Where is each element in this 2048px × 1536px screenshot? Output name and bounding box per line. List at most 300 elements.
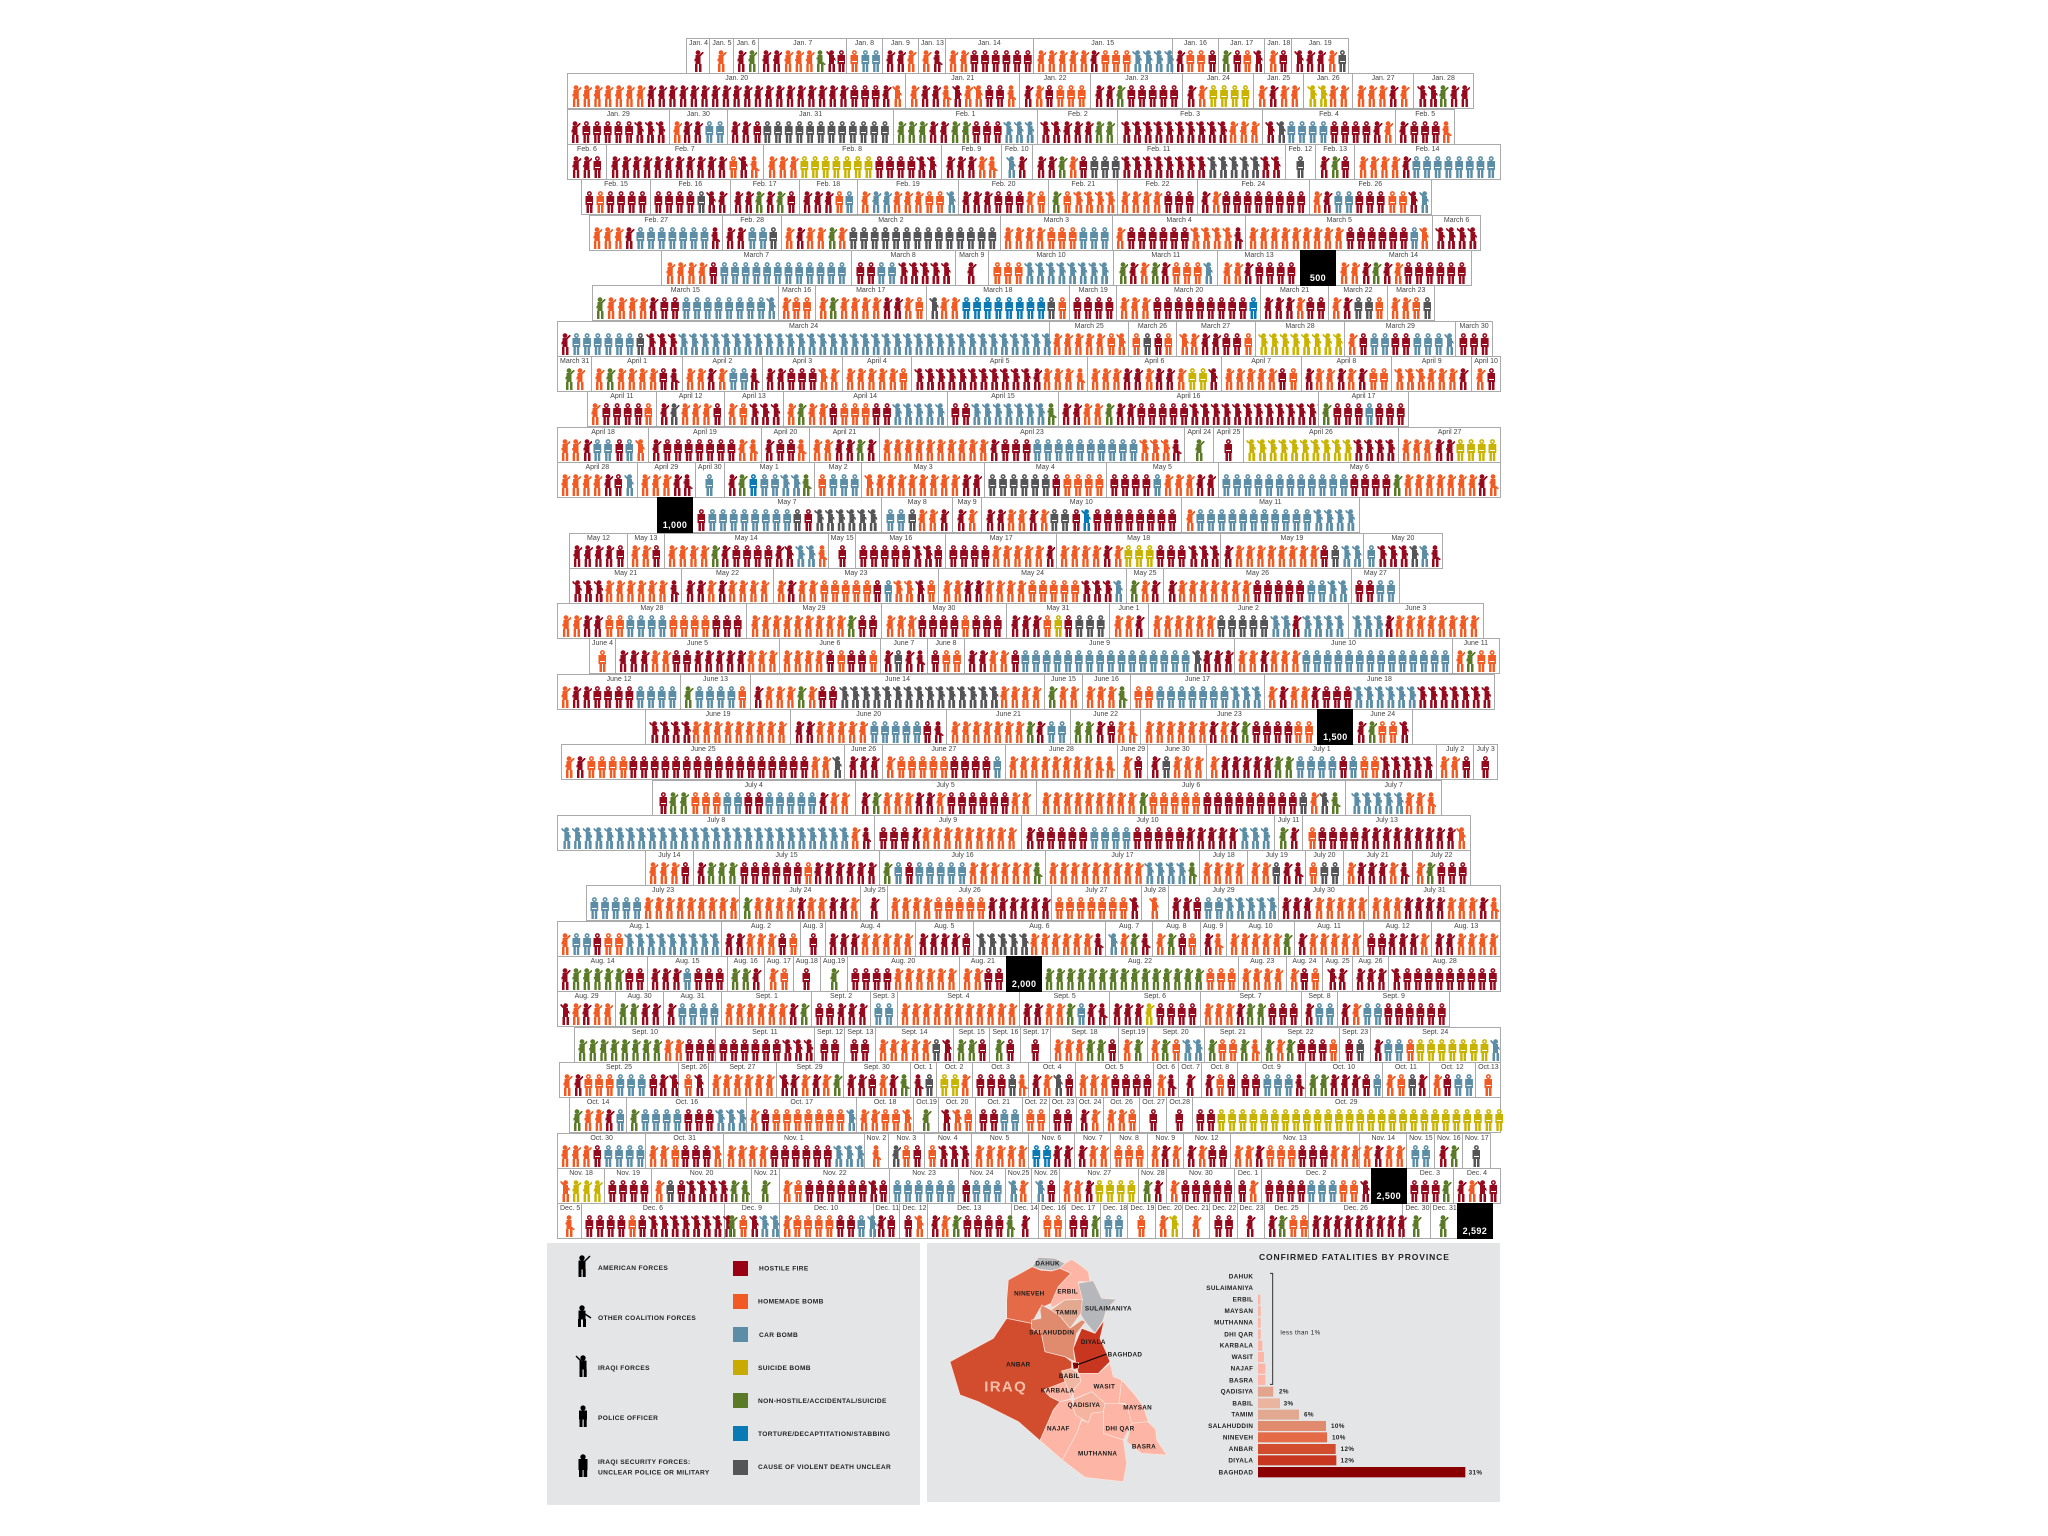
row: March 15 to March 23: March 16	[782, 287, 811, 294]
row: June 25 to July 3: June 25	[691, 746, 716, 753]
row: March 15 to March 23: March 23	[1396, 287, 1425, 294]
row: Oct. 30 to Nov. 17	[557, 1133, 1491, 1168]
row: Oct. 30 to Nov. 17: Nov. 3	[896, 1135, 916, 1142]
row: May 21 to May 27: May 24	[1021, 570, 1044, 577]
row: May 7 to May 11: May 8	[908, 499, 927, 506]
row: Feb. 27 to March 6: Feb. 27	[644, 217, 668, 224]
axis labels: SALAHUDDIN	[1208, 1423, 1253, 1430]
row: Sept. 10 to Sept. 24: Sept. 22	[1288, 1029, 1314, 1036]
row: April 18 to April 27: April 19	[693, 429, 717, 436]
row: April 11 to April 17	[587, 392, 1409, 427]
value labels: 6%	[1304, 1412, 1314, 1419]
row: Aug. 1 to Aug. 13: Aug. 13	[1454, 923, 1478, 930]
row: April 18 to April 27: April 26	[1309, 429, 1333, 436]
label: province names: TAMIM	[1056, 1310, 1078, 1317]
axis labels: MAYSAN	[1224, 1308, 1253, 1315]
row: July 14 to July 22: July 14	[658, 852, 680, 859]
row: Sept. 25 to Oct. 13: Sept. 26	[681, 1064, 707, 1071]
row: Feb. 27 to March 6: March 3	[1044, 217, 1069, 224]
row: Aug. 29 to Sept. 9: Sept. 2	[830, 993, 852, 1000]
row: June 25 to July 3: July 3	[1477, 746, 1495, 753]
row: Feb. 27 to March 6: March 5	[1327, 217, 1352, 224]
row: Jan. 29 to Feb. 5: Feb. 2	[1068, 111, 1088, 118]
row: Nov. 18 to Dec. 4	[557, 1168, 1501, 1204]
row: Feb. 15 to Feb. 26: Feb. 17	[753, 181, 777, 188]
row: Aug. 14 to Aug. 28: Aug. 21	[971, 958, 995, 965]
row: Dec. 5 to Dec. 31: Dec. 20	[1158, 1205, 1182, 1212]
row: March 31 to April 10: April 10	[1474, 358, 1498, 365]
row: June 12 to June 18: June 16	[1094, 676, 1119, 683]
row: Dec. 5 to Dec. 31: Dec. 9	[742, 1205, 762, 1212]
row: July 14 to July 22: July 16	[951, 852, 974, 859]
label: province names: NAJAF	[1047, 1426, 1070, 1433]
row: Oct. 30 to Nov. 17: Nov. 14	[1371, 1135, 1395, 1142]
row: Dec. 5 to Dec. 31: Dec. 18	[1103, 1205, 1127, 1212]
row: Oct. 30 to Nov. 17: Nov. 7	[1083, 1135, 1103, 1142]
row: Nov. 18 to Dec. 4: 2,500	[1377, 1191, 1401, 1201]
label: cause unclear: CAUSE OF VIOLENT DEATH UNCLEAR	[758, 1464, 891, 1471]
value labels: 10%	[1332, 1434, 1346, 1441]
row: June 25 to July 3: June 29	[1120, 746, 1145, 753]
row: Oct. 14 to Oct. 29: Oct. 23	[1052, 1099, 1074, 1106]
row: March 31 to April 10: April 5	[990, 358, 1010, 365]
row: Oct. 14 to Oct. 29: Oct. 26	[1110, 1099, 1133, 1106]
row: Feb. 15 to Feb. 26: Feb. 22	[1146, 181, 1170, 188]
row: Feb. 15 to Feb. 26: Feb. 15	[604, 181, 628, 188]
value labels: 31%	[1469, 1469, 1482, 1476]
row: Oct. 14 to Oct. 29: Oct. 14	[587, 1099, 609, 1106]
label: other coalition forces: OTHER COALITION FORCES	[598, 1315, 696, 1322]
row: June 25 to July 3: June 27	[931, 746, 956, 753]
row: March 15 to March 23: March 22	[1343, 287, 1373, 294]
row: June 12 to June 18: June 14	[885, 676, 910, 683]
row: Feb. 6 to Feb. 14: Feb. 7	[675, 146, 695, 153]
row: March 31 to April 10: April 7	[1251, 358, 1271, 365]
row: July 23 to July 31: July 24	[789, 887, 811, 894]
row: Nov. 18 to Dec. 4: Dec. 2	[1306, 1170, 1326, 1177]
row: Jan. 20 to Jan. 28: Jan. 20	[725, 75, 748, 82]
row: Aug. 14 to Aug. 28: 2,000	[1012, 979, 1036, 989]
row: June 25 to July 3: June 28	[1049, 746, 1074, 753]
row: Oct. 30 to Nov. 17: Nov. 2	[866, 1135, 886, 1142]
row: Oct. 30 to Nov. 17: Nov. 4	[938, 1135, 958, 1142]
row: Feb. 6 to Feb. 14	[567, 144, 1501, 180]
row: Jan. 20 to Jan. 28: Jan. 23	[1125, 75, 1148, 82]
row: June 12 to June 18: June 15	[1051, 676, 1076, 683]
row: March 24 to March 30: March 28	[1285, 323, 1315, 330]
axis labels: BAGHDAD	[1219, 1469, 1253, 1476]
icon: iraqi security forces	[578, 1454, 588, 1477]
swatch: torture	[733, 1426, 748, 1441]
swatch: suicide bomb	[733, 1360, 748, 1375]
row: Aug. 14 to Aug. 28: Aug. 26	[1358, 958, 1383, 965]
row: Oct. 30 to Nov. 17: Nov. 8	[1119, 1135, 1139, 1142]
row: May 7 to May 11: May 11	[1259, 499, 1282, 506]
row: Oct. 30 to Nov. 17: Nov. 15	[1409, 1135, 1433, 1142]
axis labels: ANBAR	[1229, 1446, 1253, 1453]
row: Oct. 14 to Oct. 29: Oct. 29	[1335, 1099, 1358, 1106]
row: April 28 to May 6: May 2	[829, 464, 848, 471]
axis labels: NAJAF	[1231, 1366, 1253, 1373]
row: July 14 to July 22: July 22	[1430, 852, 1452, 859]
row: Feb. 15 to Feb. 26: Feb. 20	[992, 181, 1016, 188]
row: Dec. 5 to Dec. 31	[557, 1203, 1493, 1239]
row: Feb. 15 to Feb. 26: Feb. 21	[1071, 181, 1095, 188]
row: Sept. 10 to Sept. 24: Sept. 13	[847, 1029, 873, 1036]
swatch: car bomb	[733, 1327, 748, 1342]
row: May 28 to June 3: May 30	[932, 605, 955, 612]
row: Dec. 5 to Dec. 31: Dec. 10	[814, 1205, 838, 1212]
row: Sept. 25 to Oct. 13: Sept. 29	[797, 1064, 823, 1071]
value labels	[1279, 1330, 1482, 1476]
row: Jan. 20 to Jan. 28: Jan. 25	[1267, 75, 1290, 82]
row: April 11 to April 17: April 16	[1177, 393, 1200, 400]
row: March 7 to March 14: March 11	[1151, 252, 1180, 259]
swatch: cause unclear	[733, 1460, 748, 1475]
row: May 12 to May 20: May 18	[1127, 535, 1150, 542]
row: May 28 to June 3: May 29	[803, 605, 825, 612]
axis labels: DHI QAR	[1224, 1331, 1253, 1338]
row: June 25 to July 3: June 26	[851, 746, 876, 753]
row: July 4 to July 7	[652, 780, 1442, 815]
label: torture: TORTURE/DECAPTITATION/STABBING	[758, 1431, 890, 1438]
row: Sept. 25 to Oct. 13: Oct. 5	[1105, 1064, 1124, 1071]
row: Jan. 29 to Feb. 5: Jan. 31	[799, 111, 822, 118]
row: June 19 to June 24: June 22	[1093, 711, 1118, 718]
row: Dec. 5 to Dec. 31: Dec. 16	[1041, 1205, 1065, 1212]
row: Feb. 6 to Feb. 14: Feb. 9	[961, 146, 981, 153]
label: province names: BABIL	[1059, 1373, 1080, 1380]
row: Sept. 25 to Oct. 13: Oct. 1	[914, 1064, 933, 1071]
row: May 7 to May 11: 1,000	[663, 520, 687, 530]
row: March 7 to March 14	[661, 250, 1472, 286]
row: July 4 to July 7: July 7	[1385, 782, 1403, 789]
row: Oct. 14 to Oct. 29: Oct.28	[1169, 1099, 1190, 1106]
row: Feb. 27 to March 6: March 2	[878, 217, 904, 224]
row: Sept. 25 to Oct. 13: Sept. 30	[864, 1064, 890, 1071]
axis labels: NINEVEH	[1223, 1434, 1253, 1441]
chart: daily fatalities rows	[557, 38, 1504, 1239]
value labels: 3%	[1284, 1400, 1294, 1407]
row: Aug. 1 to Aug. 13: Aug. 10	[1248, 923, 1273, 930]
label: province names: SALAHUDDIN	[1029, 1330, 1074, 1337]
row: April 18 to April 27: April 20	[774, 429, 797, 436]
label: province names	[1006, 1261, 1156, 1458]
row: Nov. 18 to Dec. 4: Nov. 24	[970, 1170, 994, 1177]
row: Feb. 15 to Feb. 26: Feb. 24	[1241, 181, 1265, 188]
value labels: less than 1%	[1280, 1330, 1321, 1337]
row: July 23 to July 31: July 29	[1212, 887, 1235, 894]
row: July 4 to July 7: July 6	[1182, 782, 1200, 789]
row: Aug. 1 to Aug. 13: Aug. 4	[860, 923, 881, 930]
axis labels: DAHUK	[1229, 1274, 1253, 1281]
row: April 28 to May 6: May 6	[1350, 464, 1369, 471]
label: hostile fire: HOSTILE FIRE	[759, 1266, 809, 1272]
swatch: hostile fire	[733, 1261, 748, 1276]
value labels: 10%	[1331, 1423, 1345, 1430]
row: July 14 to July 22: July 19	[1266, 852, 1288, 859]
row: May 12 to May 20: May 14	[735, 535, 758, 542]
row: Dec. 5 to Dec. 31: Dec. 26	[1344, 1205, 1368, 1212]
row: Oct. 30 to Nov. 17: Nov. 12	[1195, 1135, 1218, 1142]
row: April 11 to April 17: April 15	[991, 393, 1015, 400]
panel: legend	[547, 1243, 920, 1505]
label: police officer: POLICE OFFICER	[598, 1415, 658, 1422]
row: April 11 to April 17: April 13	[742, 393, 766, 400]
row: Feb. 6 to Feb. 14: Feb. 13	[1323, 146, 1347, 153]
label: province names: SULAIMANIYA	[1085, 1305, 1132, 1312]
row: Dec. 5 to Dec. 31: Dec. 23	[1240, 1205, 1264, 1212]
row: April 11 to April 17: April 17	[1352, 393, 1375, 400]
row: Aug. 14 to Aug. 28	[557, 956, 1501, 992]
row: March 31 to April 10: April 4	[867, 358, 887, 365]
row: Nov. 18 to Dec. 4: Nov. 26	[1034, 1170, 1058, 1177]
row: June 4 to June 11: June 7	[893, 640, 914, 647]
axis labels: DIYALA	[1228, 1457, 1253, 1464]
row: Jan. 20 to Jan. 28: Jan. 21	[951, 75, 974, 82]
value labels: 2%	[1279, 1389, 1289, 1396]
icon: other coalition forces	[578, 1305, 591, 1327]
row: Oct. 14 to Oct. 29: Oct. 24	[1079, 1099, 1101, 1106]
row: April 18 to April 27: April 27	[1438, 429, 1461, 436]
row: Jan. 29 to Feb. 5	[567, 109, 1455, 144]
row: June 12 to June 18: June 17	[1185, 676, 1210, 683]
row: Sept. 25 to Oct. 13: Oct. 11	[1395, 1064, 1417, 1071]
row: Nov. 18 to Dec. 4: Nov. 20	[690, 1170, 713, 1177]
row: Feb. 15 to Feb. 26	[581, 180, 1432, 215]
row: Aug. 29 to Sept. 9: Aug. 30	[628, 993, 652, 1000]
row: May 21 to May 27: May 26	[1246, 570, 1269, 577]
row: Aug. 14 to Aug. 28: Aug. 28	[1433, 958, 1457, 965]
row: Feb. 6 to Feb. 14: Feb. 11	[1147, 146, 1170, 153]
row: Sept. 25 to Oct. 13: Oct. 3	[991, 1064, 1010, 1071]
swatch: homemade bomb	[733, 1294, 748, 1309]
row: June 19 to June 24: June 23	[1217, 711, 1242, 718]
row: Feb. 15 to Feb. 26: Feb. 16	[678, 181, 702, 188]
row: May 7 to May 11: May 10	[1070, 499, 1093, 506]
row: Jan. 20 to Jan. 28: Jan. 28	[1432, 75, 1455, 82]
row: Sept. 25 to Oct. 13: Oct. 2	[945, 1064, 963, 1071]
label: province names: MAYSAN	[1123, 1404, 1152, 1411]
row: Oct. 30 to Nov. 17: Oct. 31	[673, 1135, 696, 1142]
row: Jan. 4 to Jan. 19: Jan. 16	[1184, 40, 1207, 47]
row: Oct. 14 to Oct. 29: Oct.19	[916, 1099, 937, 1106]
row: Oct. 14 to Oct. 29: Oct. 27	[1142, 1099, 1165, 1106]
row: Aug. 1 to Aug. 13: Aug. 5	[934, 923, 954, 930]
row: Aug. 1 to Aug. 13: Aug. 6	[1029, 923, 1049, 930]
bracket: less than 1%	[1270, 1273, 1273, 1384]
row: March 7 to March 14: March 8	[891, 252, 916, 259]
row: May 21 to May 27: May 21	[614, 570, 637, 577]
row: March 15 to March 23: March 17	[856, 287, 885, 294]
row: July 8 to July 13: July 10	[1137, 817, 1159, 824]
icon: police officer	[579, 1405, 587, 1427]
row: Feb. 6 to Feb. 14: Feb. 10	[1005, 146, 1029, 153]
row: May 21 to May 27: May 25	[1134, 570, 1157, 577]
row: Aug. 14 to Aug. 28: Aug.19	[823, 958, 845, 965]
row: July 14 to July 22: July 15	[775, 852, 798, 859]
row: Sept. 25 to Oct. 13: Oct.13	[1478, 1064, 1499, 1071]
row: Jan. 4 to Jan. 19: Jan. 7	[793, 40, 812, 47]
row: June 4 to June 11: June 9	[1089, 640, 1110, 647]
row: March 31 to April 10: April 3	[792, 358, 812, 365]
row: June 25 to July 3: June 30	[1165, 746, 1190, 753]
row: Feb. 6 to Feb. 14: Feb. 6	[577, 146, 597, 153]
row: July 23 to July 31: July 30	[1313, 887, 1335, 894]
row: May 12 to May 20: May 13	[634, 535, 657, 542]
row: Dec. 5 to Dec. 31: Dec. 17	[1071, 1205, 1095, 1212]
row: Jan. 4 to Jan. 19: Jan. 8	[855, 40, 874, 47]
row: Sept. 10 to Sept. 24: Sept. 15	[959, 1029, 985, 1036]
row: Sept. 10 to Sept. 24: Sept. 21	[1220, 1029, 1246, 1036]
row: July 8 to July 13: July 11	[1278, 817, 1299, 824]
row: July 4 to July 7: July 4	[745, 782, 763, 789]
value labels: 12%	[1341, 1446, 1354, 1453]
bars	[1258, 1295, 1465, 1477]
axis labels	[1206, 1274, 1253, 1476]
row: Dec. 5 to Dec. 31: Dec. 25	[1274, 1205, 1299, 1212]
row: March 24 to March 30: March 29	[1386, 323, 1415, 330]
row: March 24 to March 30	[557, 321, 1493, 356]
row: Oct. 30 to Nov. 17: Nov. 5	[990, 1135, 1009, 1142]
panel: province map and fatalities	[927, 1243, 1500, 1502]
row: Aug. 14 to Aug. 28: Aug. 25	[1325, 958, 1350, 965]
row: March 15 to March 23: March 20	[1174, 287, 1203, 294]
row: Feb. 15 to Feb. 26: Feb. 19	[896, 181, 920, 188]
row: March 7 to March 14: March 7	[744, 252, 769, 259]
row: March 7 to March 14: March 10	[1036, 252, 1066, 259]
row: Oct. 30 to Nov. 17: Nov. 13	[1283, 1135, 1307, 1142]
row: Sept. 10 to Sept. 24	[574, 1027, 1501, 1062]
axis labels: MUTHANNA	[1214, 1320, 1253, 1327]
row: July 23 to July 31: July 31	[1423, 887, 1446, 894]
row: April 18 to April 27: April 24	[1187, 429, 1211, 436]
axis labels: TAMIM	[1231, 1412, 1253, 1419]
row: Jan. 29 to Feb. 5: Feb. 1	[956, 111, 976, 118]
row: June 12 to June 18: June 12	[607, 676, 632, 683]
row: Nov. 18 to Dec. 4: Nov. 18	[569, 1170, 593, 1177]
row: Dec. 5 to Dec. 31: Dec. 6	[643, 1205, 663, 1212]
icon: iraqi forces	[576, 1355, 587, 1377]
label: iraqi security forces: UNCLEAR POLICE OR MILITARY	[598, 1470, 710, 1476]
row: Dec. 5 to Dec. 31: 2,592	[1463, 1226, 1487, 1236]
bar chart: confirmed fatalities by province	[1206, 1252, 1482, 1478]
row: Aug. 29 to Sept. 9	[557, 992, 1450, 1027]
row: Jan. 4 to Jan. 19: Jan. 19	[1309, 40, 1332, 47]
row: May 7 to May 11: May 9	[958, 499, 977, 506]
row: Feb. 6 to Feb. 14: Feb. 14	[1416, 146, 1439, 153]
row: Jan. 20 to Jan. 28	[567, 73, 1474, 109]
axis labels: BASRA	[1229, 1377, 1253, 1384]
row: March 31 to April 10: April 9	[1422, 358, 1442, 365]
row: March 7 to March 14: March 9	[959, 252, 984, 259]
row: June 25 to July 3: July 1	[1312, 746, 1331, 753]
axis labels: BABIL	[1232, 1400, 1253, 1407]
row: Sept. 10 to Sept. 24: Sept. 17	[1023, 1029, 1049, 1036]
row: Jan. 4 to Jan. 19: Jan. 17	[1230, 40, 1253, 47]
row: Aug. 29 to Sept. 9: Sept. 4	[947, 993, 970, 1000]
row: Feb. 15 to Feb. 26: Feb. 18	[816, 181, 840, 188]
row: March 31 to April 10: April 6	[1145, 358, 1164, 365]
row: June 4 to June 11	[589, 638, 1500, 674]
row: June 4 to June 11: June 4	[592, 640, 613, 647]
row: July 14 to July 22	[645, 851, 1471, 885]
label: province names: NINEVEH	[1014, 1291, 1045, 1298]
row: Jan. 4 to Jan. 19	[686, 38, 1349, 73]
row: Oct. 14 to Oct. 29: Oct. 22	[1025, 1099, 1047, 1106]
row: April 11 to April 17: April 12	[679, 393, 702, 400]
row: Dec. 5 to Dec. 31: Dec. 22	[1212, 1205, 1236, 1212]
map: Iraq provinces	[950, 1257, 1167, 1482]
row: July 8 to July 13: July 9	[939, 817, 957, 824]
row: June 19 to June 24: June 24	[1370, 711, 1395, 718]
row: June 19 to June 24: June 19	[706, 711, 731, 718]
row: May 28 to June 3	[557, 603, 1484, 639]
row: Dec. 5 to Dec. 31: Dec. 11	[876, 1205, 899, 1212]
row: Dec. 5 to Dec. 31: Dec. 30	[1405, 1205, 1429, 1212]
row: Sept. 25 to Oct. 13: Oct. 10	[1333, 1064, 1355, 1071]
row: April 28 to May 6: April 28	[585, 464, 609, 471]
label: non-hostile: NON-HOSTILE/ACCIDENTAL/SUICIDE	[758, 1398, 887, 1405]
row: Sept. 25 to Oct. 13: Oct. 4	[1043, 1064, 1062, 1071]
row: Aug. 1 to Aug. 13: Aug. 8	[1166, 923, 1187, 930]
row: Sept. 10 to Sept. 24: Sept. 23	[1342, 1029, 1368, 1036]
row: Feb. 27 to March 6	[589, 215, 1481, 251]
row: Dec. 5 to Dec. 31: Dec. 31	[1433, 1205, 1457, 1212]
row: Sept. 10 to Sept. 24: Sept. 11	[752, 1029, 778, 1036]
row: June 4 to June 11: June 10	[1331, 640, 1356, 647]
row: June 19 to June 24	[645, 709, 1413, 745]
row: July 14 to July 22: July 20	[1313, 852, 1336, 859]
label: province names: ERBIL	[1057, 1288, 1078, 1295]
label: province names: DAHUK	[1035, 1261, 1060, 1268]
row: Nov. 18 to Dec. 4: Nov. 22	[823, 1170, 847, 1177]
row: June 25 to July 3	[561, 744, 1498, 780]
row: July 8 to July 13: July 8	[707, 817, 725, 824]
row: April 11 to April 17: April 11	[610, 393, 633, 400]
row: July 23 to July 31: July 27	[1085, 887, 1107, 894]
row: Sept. 10 to Sept. 24: Sept. 18	[1072, 1029, 1098, 1036]
row: July 23 to July 31: July 28	[1144, 887, 1166, 894]
row: Dec. 5 to Dec. 31: Dec. 14	[1014, 1205, 1038, 1212]
label: province names: DIYALA	[1081, 1339, 1106, 1346]
row: Aug. 29 to Sept. 9: Sept. 5	[1054, 993, 1076, 1000]
value labels: 12%	[1341, 1457, 1354, 1464]
row: July 8 to July 13: July 13	[1376, 817, 1398, 824]
row: Nov. 18 to Dec. 4: Dec. 3	[1420, 1170, 1440, 1177]
label: province names: KARBALA	[1041, 1387, 1075, 1394]
row: Aug. 1 to Aug. 13: Aug. 1	[629, 923, 650, 930]
row: Aug. 14 to Aug. 28: Aug. 15	[675, 958, 700, 965]
row: Dec. 5 to Dec. 31: Dec. 12	[902, 1205, 927, 1212]
row: July 14 to July 22: July 18	[1213, 852, 1235, 859]
row: Aug. 29 to Sept. 9: Sept. 6	[1144, 993, 1166, 1000]
row: Nov. 18 to Dec. 4: Nov. 23	[912, 1170, 936, 1177]
swatch: non-hostile	[733, 1393, 748, 1408]
row: Feb. 6 to Feb. 14: Feb. 12	[1288, 146, 1312, 153]
row: Dec. 5 to Dec. 31: Dec. 21	[1185, 1205, 1209, 1212]
label: province names: ANBAR	[1006, 1361, 1031, 1368]
row: Sept. 10 to Sept. 24: Sept. 24	[1422, 1029, 1448, 1036]
row: Sept. 10 to Sept. 24: Sept. 14	[901, 1029, 927, 1036]
axis labels: KARBALA	[1220, 1343, 1253, 1350]
row: May 28 to June 3: June 1	[1119, 605, 1140, 612]
label: province names: WASIT	[1093, 1383, 1115, 1390]
row: May 12 to May 20: May 17	[990, 535, 1013, 542]
row: Jan. 4 to Jan. 19: Jan. 5	[712, 40, 731, 47]
row: April 28 to May 6: May 5	[1153, 464, 1172, 471]
row: Jan. 29 to Feb. 5: Feb. 4	[1319, 111, 1339, 118]
